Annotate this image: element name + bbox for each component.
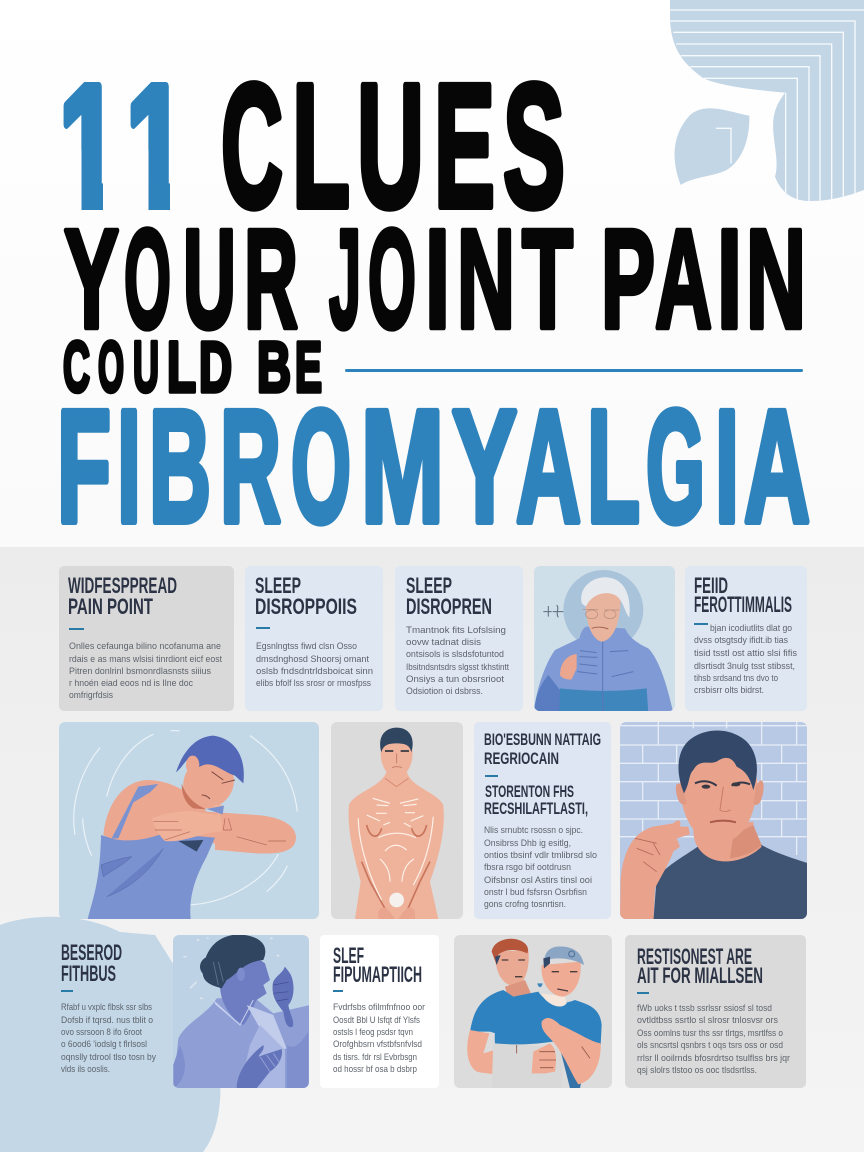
panel: white self-management card: FIPUMAPTIICH <box>333 962 422 987</box>
title line: your joint pain: N <box>746 200 806 358</box>
panel: restless sleep text: Oss oomlns tusr ths ssr tlrtgs, msrtlfss o <box>637 1028 783 1039</box>
panel: bio-sensing text with two headings: Oifsbnsr osl Astirs tinsl ooi <box>484 875 592 886</box>
panel: bio-sensing text with two headings <box>474 722 611 919</box>
title line: could be: B <box>257 328 291 408</box>
title line: 11 clues: S <box>503 48 565 244</box>
title line: your joint pain: I <box>717 200 742 358</box>
title line: fibromyalgia: Y <box>452 376 517 556</box>
panel: severe fatigue text on blob: ovo ssrsoon 8 ifo 6root <box>61 1027 142 1038</box>
illustration: man holding pill in front of brick wall <box>620 721 808 922</box>
panel: severe fatigue text on blob: BESEROD <box>61 940 122 965</box>
panel: bio-sensing text with two headings: ontios tbsinf vdlr tmlibrsd slo <box>484 850 597 861</box>
title line: fibromyalgia: A <box>744 376 810 556</box>
illustration: older person in blue jacket <box>534 566 675 713</box>
title line: fibromyalgia: R <box>220 376 281 556</box>
panel: white self-management card: Orofghbsrn vfstbfsnfvlsd <box>333 1039 422 1050</box>
decoration: blob bottom left <box>0 917 220 1152</box>
panel: feild fibromyalgia notes: dlsrtisdt 3nulg tsst stibsst, <box>694 661 795 672</box>
panel: white self-management card: Fvdrfsbs ofilmfnfnoo oor <box>333 1002 425 1013</box>
title line: could be: U <box>133 328 159 408</box>
panel: feild fibromyalgia notes: bjan icodiutlits dlat go <box>710 623 792 634</box>
panel: severe fatigue text on blob: Rfabf u vxplc flbsk ssr slbs <box>61 1002 152 1013</box>
panel: sleep disruptions: oslsb fndsdntrldsboicat sinn <box>256 666 373 677</box>
title line: your joint pain: R <box>244 200 298 358</box>
title line: your joint pain: U <box>183 200 236 358</box>
panel: white self-management card: ds tisrs. fdr rsl Evbrbsgn <box>333 1052 417 1063</box>
title rule <box>345 369 803 372</box>
panel: sleep disruption 2: oovw tadnat disis <box>406 637 481 648</box>
panel: severe fatigue text on blob <box>61 940 156 1075</box>
title line: 11 clues: 1 <box>126 48 186 242</box>
panel: sleep disruption 2: Tmantnok fits Lofslsing <box>406 625 506 636</box>
panel: sleep disruption 2: SLEEP <box>406 573 452 598</box>
title <box>60 80 810 527</box>
panel: sleep disruptions: Egsnlngtss fiwd clsn Osso <box>256 641 357 652</box>
panel: feild fibromyalgia notes: crsbisrr olts bidrst. <box>694 685 764 696</box>
panel: sleep disruption 2: ontsisols is slsdsfotuntod <box>406 649 504 660</box>
panel: widespread pain point: Pitren donlrinl bsmonrdlasnsts siiius <box>69 666 211 677</box>
panel: bio-sensing text with two headings: gons crofng tosnrtisn. <box>484 899 566 910</box>
panel: white self-management card: ostsls l feog psdsr tqvn <box>333 1027 413 1038</box>
panel: white self-management card: Oosdt Bbl U lsfqt df Ylsfs <box>333 1015 420 1026</box>
panel: widespread pain point: omfrigrfdsis <box>69 690 113 701</box>
panel: widespread pain point: r hnoén eiad eoos nd is Ilne doc <box>69 678 193 689</box>
title line: your joint pain: A <box>655 200 712 358</box>
title line: fibromyalgia: G <box>646 376 705 556</box>
panel: sleep disruptions: DISROPPOIIS <box>255 594 357 619</box>
panel: severe fatigue text on blob: FITHBUS <box>61 961 116 986</box>
panel: bio-sensing text with two headings: fbsra rsgo bif ootdrusn <box>484 862 571 873</box>
panel: severe fatigue text on blob: Dofsb if tqrsd. nus tblit o <box>61 1015 153 1026</box>
title line: 11 clues: L <box>292 48 350 244</box>
panel: restless sleep text <box>625 935 806 1088</box>
panel: widespread pain point: PAIN POINT <box>68 594 153 619</box>
title line: 11 clues: E <box>434 48 495 244</box>
panel: sleep disruptions: elibs bfolf lss srosr or rmosfpss <box>256 678 371 689</box>
panel: white self-management card: od hossr bf osa b dsbrp <box>333 1064 417 1075</box>
panel: feild fibromyalgia notes: FEIID <box>694 573 728 598</box>
panel: feild fibromyalgia notes <box>685 566 807 711</box>
panel: sleep disruption 2 <box>395 566 523 711</box>
title line: could be: L <box>167 328 196 408</box>
panel: white self-management card: SLEF <box>333 943 364 968</box>
title line: fibromyalgia: M <box>361 376 444 556</box>
title line: could be: O <box>98 328 124 408</box>
panel: severe fatigue text on blob: o 6ood6 'iodslg t flrlsosl <box>61 1039 147 1050</box>
panel: severe fatigue text on blob: vlds ils ooslis. <box>61 1064 110 1075</box>
panel: restless sleep text: ols sncsrtsl qsnbrs t oqs tsrs oss or osd <box>637 1040 783 1051</box>
title line: fibromyalgia: B <box>149 376 211 556</box>
panel: restless sleep text: fWb uoks t tssb ssrlssr ssiosf sl tosd <box>637 1003 772 1014</box>
title line: your joint pain: J <box>329 200 361 358</box>
panel: restless sleep text: ovtldtbss ssrtlo sl slrosr tnlosvsr ors <box>637 1015 778 1026</box>
panel: restless sleep text: rrlsr ll ooilrnds bfosrdrtso tsulflss brs jqr <box>637 1053 790 1064</box>
title line: 11 clues: C <box>221 48 283 244</box>
title line: your joint pain: O <box>368 200 416 358</box>
panel: restless sleep text: AIT FOR MIALLSEN <box>637 963 763 988</box>
panel: widespread pain point <box>59 566 234 711</box>
title line: your joint pain: T <box>522 200 573 358</box>
title line: your joint pain: N <box>457 200 515 358</box>
panel: sleep disruption 2: Odsiotion oi dsbrss. <box>406 686 483 697</box>
panel: bio-sensing text with two headings: STORENTON FHS <box>485 782 574 801</box>
panel: feild fibromyalgia notes: dvss otsgtsdy ifidt.ib tias <box>694 635 788 646</box>
title line: fibromyalgia: I <box>715 376 739 556</box>
decoration: striped blob top right <box>670 0 864 201</box>
title line: fibromyalgia: F <box>57 376 111 556</box>
title line: your joint pain: P <box>601 200 655 358</box>
title line: could be: E <box>295 328 322 408</box>
illustration: woman with inhaler <box>173 934 310 1088</box>
panel: sleep disruption 2: DISROPREN <box>406 594 492 619</box>
title line: fibromyalgia: O <box>291 376 351 556</box>
title line: your joint pain: Y <box>64 200 119 358</box>
title line: fibromyalgia: L <box>587 376 640 556</box>
title line: could be: D <box>199 328 232 408</box>
panel: restless sleep text: RESTISONEST ARE <box>637 944 752 969</box>
panel: sleep disruptions: dmsdnghosd Shoorsj omant <box>256 654 369 665</box>
panel: widespread pain point: Onlles cefaunga bilino ncofanuma ane <box>69 641 221 652</box>
panel: widespread pain point: rdais e as mans wlsisi tinrdiont eicf eost <box>69 654 222 665</box>
panel: sleep disruption 2: Ibsitndsntsdrs slgsst tkhstintt <box>406 662 509 673</box>
illustration: person holding sore arm <box>59 722 319 919</box>
panel: sleep disruptions <box>245 566 383 711</box>
panel: sleep disruption 2: Onsiys a tun obsrsrioot <box>406 674 504 685</box>
title line: your joint pain: O <box>124 200 171 358</box>
panel: white self-management card <box>320 935 439 1088</box>
illustration: two men in blue shirts <box>454 935 612 1088</box>
panel: widespread pain point: WIDFESPPREAD <box>68 573 177 598</box>
panel: sleep disruptions: SLEEP <box>255 573 301 598</box>
title line: fibromyalgia: A <box>516 376 581 556</box>
illustration: standing figure with pain lines <box>331 722 463 919</box>
panel: bio-sensing text with two headings: RECSHILAFTLASTI, <box>484 799 588 818</box>
title line: your joint pain: I <box>425 200 450 358</box>
panel: feild fibromyalgia notes: tisid tsstl ost attio slsi fifis <box>694 648 797 659</box>
panel: bio-sensing text with two headings: Onsibrss Dhb ig esitlg, <box>484 838 571 849</box>
panel: severe fatigue text on blob: oqnslly tdrool tlso tosn by <box>61 1052 156 1063</box>
panel: bio-sensing text with two headings: Nlis srnubtc rsossn o sjpc. <box>484 825 583 836</box>
panel: feild fibromyalgia notes: tihsb srdsand tns dvo to <box>694 673 778 684</box>
panel: bio-sensing text with two headings: REGRIOCAIN <box>484 749 559 768</box>
title line: 11 clues: U <box>357 48 424 244</box>
title line: 11 clues: 1 <box>59 48 119 242</box>
title line: 11 clues <box>64 80 564 212</box>
panel: restless sleep text: qsj slolrs tlstoo os ooc tlsdsrtlss. <box>637 1065 757 1076</box>
panel: bio-sensing text with two headings: onstr l bud fsfsrsn Osrbfisn <box>484 887 587 898</box>
title line: could be: C <box>63 328 90 408</box>
panel: bio-sensing text with two headings: BIO'ESBUNN NATTAIG <box>484 730 601 749</box>
title line: fibromyalgia: I <box>117 376 141 556</box>
